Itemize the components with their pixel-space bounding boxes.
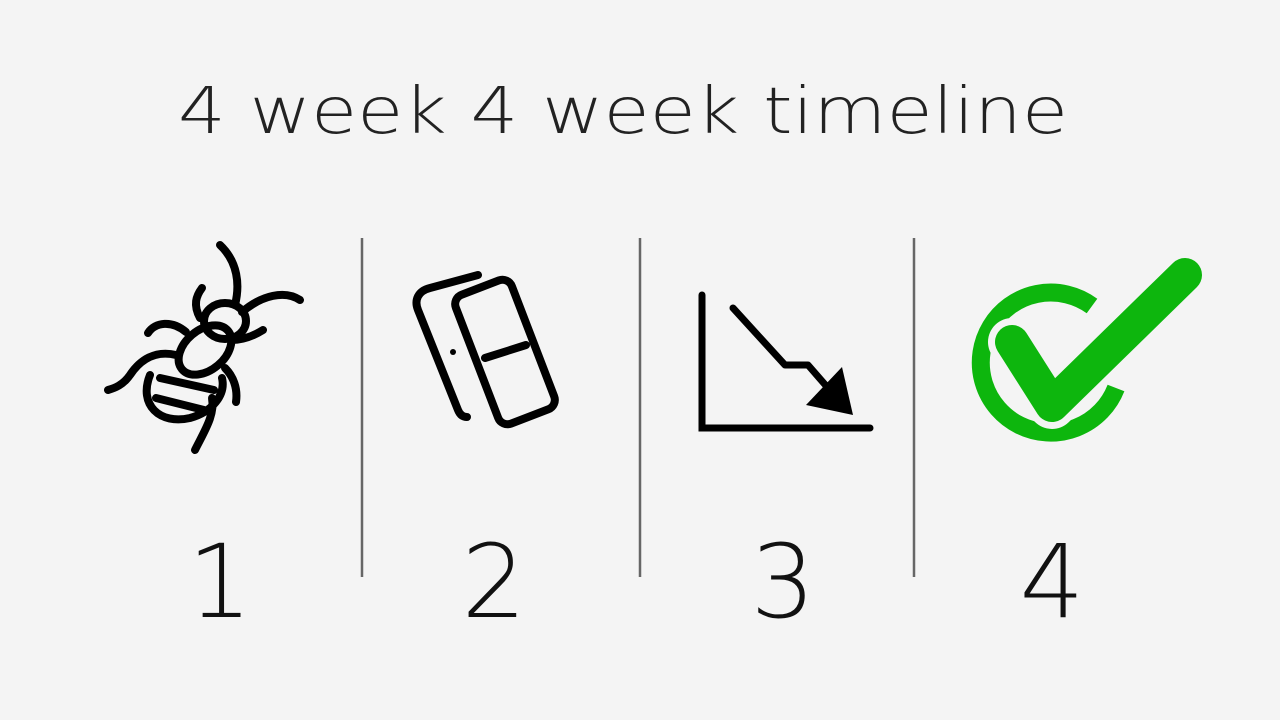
numbers (188, 523, 1084, 642)
title: 4 week 4 week timeline (178, 75, 1068, 149)
icon: green check (981, 275, 1185, 433)
numbers: 4 (1020, 523, 1084, 642)
numbers: 3 (751, 523, 815, 642)
icon: bug (108, 245, 300, 450)
icon: doors (416, 275, 558, 427)
numbers: 2 (462, 523, 526, 642)
numbers: 1 (188, 523, 252, 642)
icon: declining chart (702, 295, 870, 428)
